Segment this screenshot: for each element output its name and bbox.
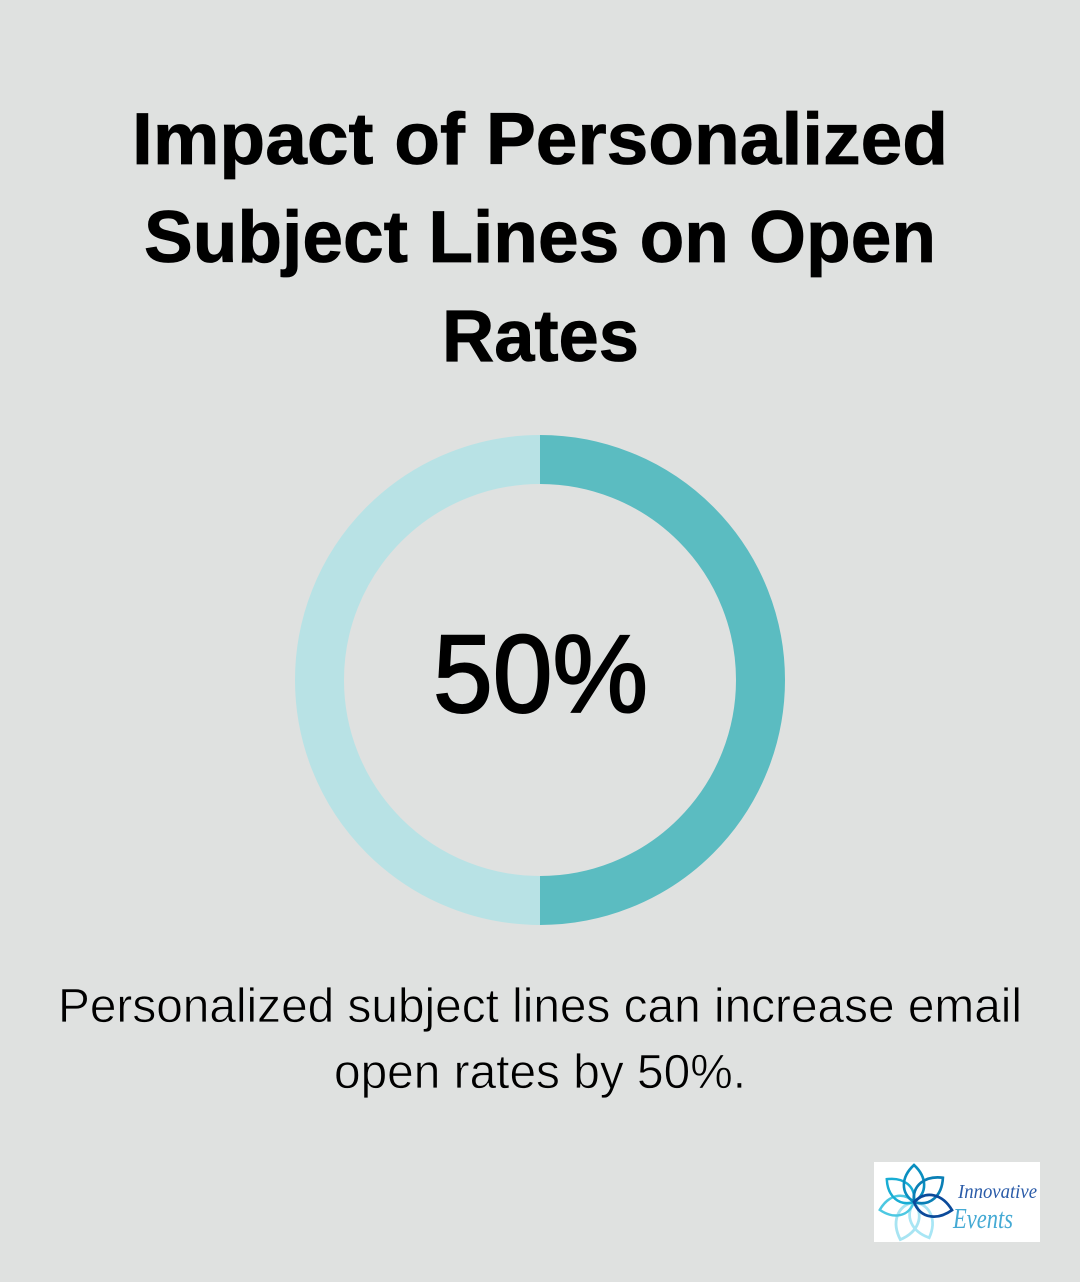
remaining segment: [320, 460, 540, 900]
logo wordmark: Events: [952, 1204, 1013, 1235]
title: Subject Lines on Open: [144, 197, 936, 278]
description text: open rates by 50%.: [334, 1046, 746, 1099]
logo: Innovative Events: [874, 1162, 1040, 1243]
title: [132, 99, 948, 377]
description text: Personalized subject lines can increase email: [58, 980, 1022, 1033]
highlighted segment: [540, 460, 760, 900]
logo wordmark: [952, 1181, 1037, 1235]
title: Impact of Personalized: [132, 99, 948, 180]
description text: [58, 980, 1022, 1099]
donut chart: 50%: [320, 460, 760, 900]
donut value: 50%: [433, 613, 648, 736]
logo wordmark: Innovative: [957, 1181, 1037, 1203]
icon: lotus flower: [878, 1165, 954, 1243]
title: Rates: [442, 296, 639, 377]
